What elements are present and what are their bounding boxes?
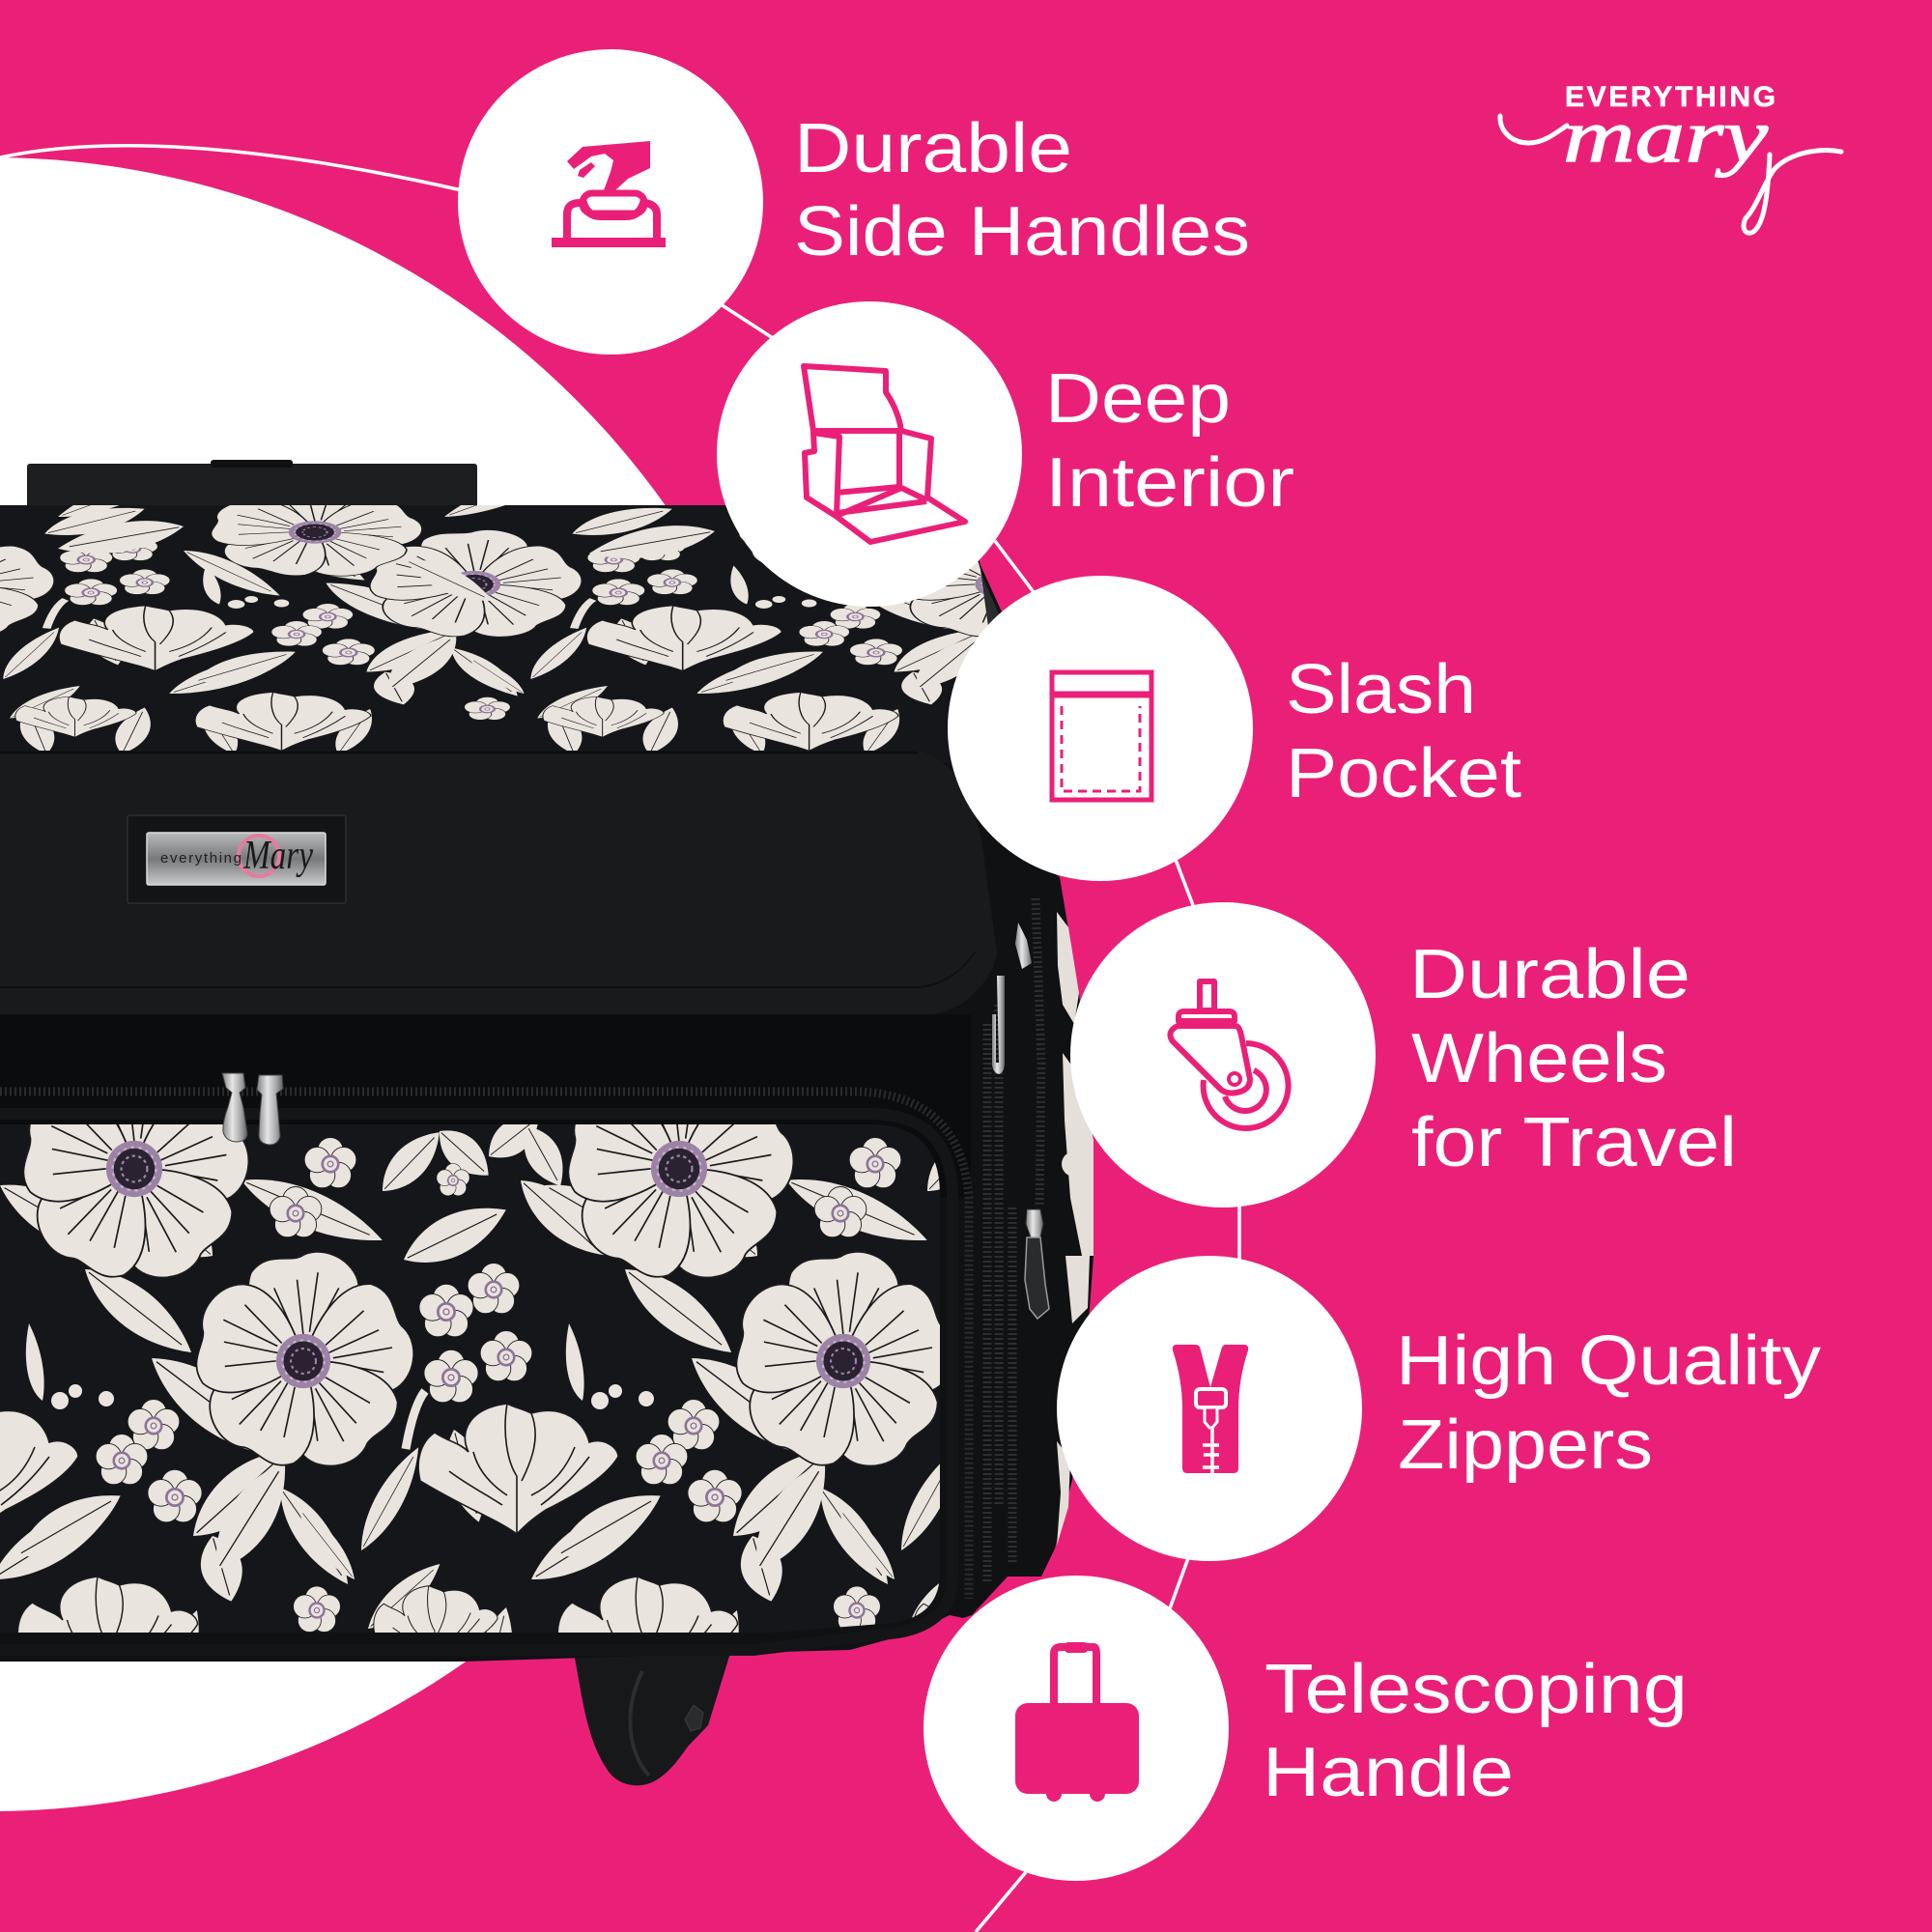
top lid floral print panel	[0, 505, 988, 751]
label: Interior	[1045, 444, 1294, 522]
icon: caster wheel	[1170, 981, 1289, 1128]
icon: pocket	[1050, 672, 1152, 800]
lower compartment shadow	[0, 1014, 971, 1198]
logo: Everything Mary: mary	[1563, 94, 1768, 178]
squashed top poppies	[58, 505, 762, 601]
icon: luggage with handle	[1015, 1642, 1139, 1802]
label: Slash	[1286, 651, 1476, 728]
label: Handle	[1263, 1734, 1514, 1811]
icon: open box	[804, 366, 965, 542]
label: Telescoping	[1264, 1651, 1688, 1728]
brand badge on flap: Mary	[242, 834, 313, 878]
label	[1409, 936, 1737, 1181]
feature: telescoping handle	[923, 1576, 1688, 1881]
icon: zipper	[1173, 1345, 1248, 1473]
feature: durable wheels for travel	[1070, 902, 1737, 1208]
label: Durable	[1409, 936, 1690, 1013]
lid pattern tiles	[0, 499, 1359, 756]
feature: slash pocket	[948, 576, 1521, 881]
feature: deep interior	[717, 301, 1294, 607]
label	[1286, 651, 1521, 812]
label: High Quality	[1396, 1322, 1821, 1400]
logo: Everything Mary	[1500, 81, 1841, 233]
side gusset zipper tracks	[987, 898, 1041, 1584]
front pocket floral print panel	[0, 1124, 940, 1633]
feature: high quality zippers	[1057, 1256, 1821, 1561]
front flap	[0, 751, 997, 1016]
label: Side Handles	[794, 193, 1250, 270]
side gusset floral print	[1057, 912, 1094, 1546]
brand badge on flap	[128, 815, 346, 903]
label	[1045, 360, 1294, 522]
label: Durable	[794, 110, 1072, 187]
wheel	[574, 1650, 731, 1785]
label	[1263, 1651, 1688, 1811]
side strap edge	[976, 570, 1001, 696]
label	[1396, 1322, 1821, 1484]
front pocket zipper track	[0, 1092, 969, 1599]
brand badge on flap: everything	[160, 850, 242, 867]
front zipper pulls	[222, 1073, 283, 1145]
rolling bag photo illustration	[0, 460, 1094, 1785]
bag silhouette	[0, 505, 1094, 1662]
telescoping handle top	[27, 460, 477, 510]
label	[794, 110, 1250, 270]
label: Zippers	[1398, 1406, 1653, 1484]
label: Deep	[1045, 360, 1231, 438]
side zipper pull	[1025, 1209, 1049, 1319]
label: for Travel	[1411, 1104, 1737, 1181]
icon: hand lifting handle	[552, 141, 666, 247]
label: Pocket	[1286, 735, 1521, 812]
connector lines	[0, 146, 1239, 1932]
label: Wheels	[1411, 1020, 1667, 1097]
feature: durable side handles	[458, 49, 1250, 355]
white background circle	[0, 157, 818, 1811]
logo: Everything Mary: EVERYTHING	[1565, 81, 1776, 113]
side buckle hardware	[992, 923, 1032, 1074]
front pocket piping	[0, 1114, 952, 1650]
